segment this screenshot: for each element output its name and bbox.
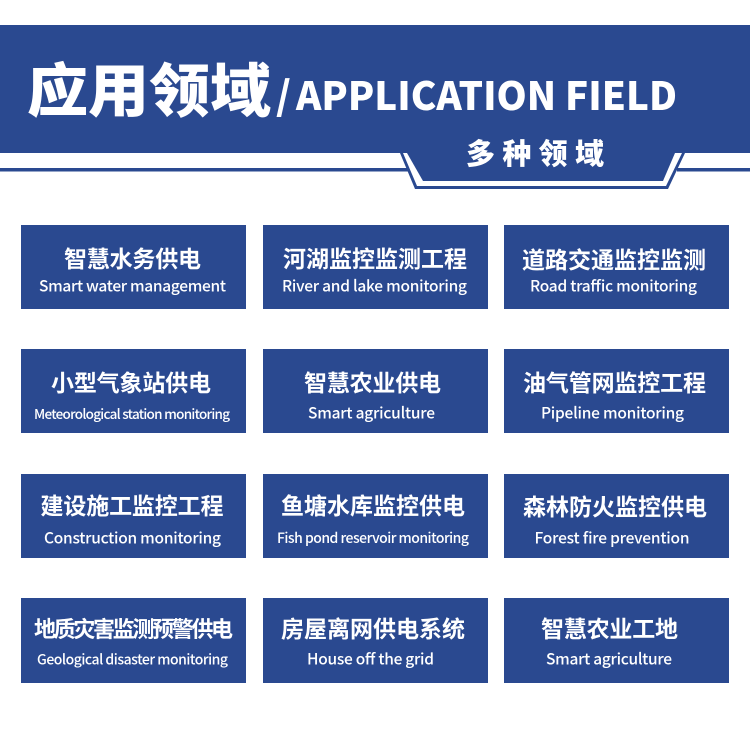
card subtitle: Pipeline monitoring (541, 402, 684, 424)
card title: 河湖监控监测工程 (283, 240, 467, 274)
card subtitle: Smart water management (39, 274, 226, 296)
card title: 房屋离网供电系统 (281, 610, 465, 644)
card title: 道路交通监控监测 (522, 241, 706, 275)
card title: 智慧水务供电 (64, 240, 201, 274)
card: smart water (21, 225, 246, 309)
title: Chinese: 应用领域 (27, 44, 271, 128)
card subtitle: Meteorological station monitoring (34, 403, 230, 423)
card subtitle: Road traffic monitoring (530, 274, 697, 296)
card subtitle: Forest fire prevention (534, 526, 690, 548)
card: construction (21, 474, 246, 558)
card title: 鱼塘水库监控供电 (281, 487, 465, 521)
card title: 森林防火监控供电 (523, 488, 707, 522)
card subtitle: Smart agriculture (546, 648, 672, 670)
card subtitle: Construction monitoring (44, 526, 221, 548)
card: road traffic (504, 225, 729, 309)
header banner (0, 25, 750, 189)
card: smart agriculture (263, 349, 488, 433)
card: meteorological (21, 349, 246, 433)
card subtitle: Fish pond reservoir monitoring (277, 528, 469, 548)
card title: 小型气象站供电 (51, 364, 211, 398)
card subtitle: River and lake monitoring (282, 274, 467, 296)
card title: 油气管网监控工程 (523, 364, 706, 398)
title: slash: / (276, 66, 291, 122)
card: geological (21, 598, 246, 683)
card: river and lake (263, 225, 488, 309)
card subtitle: House off the grid (307, 648, 434, 670)
card title: 智慧农业工地 (541, 610, 678, 644)
card title: 智慧农业供电 (304, 364, 441, 398)
badge subtitle: 多种领域 (466, 131, 604, 173)
card: forest fire (504, 474, 729, 558)
card: fish pond (263, 474, 488, 558)
card subtitle: Smart agriculture (308, 402, 435, 424)
card title: 地质灾害监测预警供电 (34, 612, 233, 644)
card: pipeline (504, 349, 729, 433)
card: off grid (263, 598, 488, 683)
card subtitle: Geological disaster monitoring (37, 650, 228, 670)
title: English: APPLICATION FIELD (295, 66, 677, 122)
card: smart agriculture site (504, 598, 729, 683)
card title: 建设施工监控工程 (40, 487, 224, 521)
